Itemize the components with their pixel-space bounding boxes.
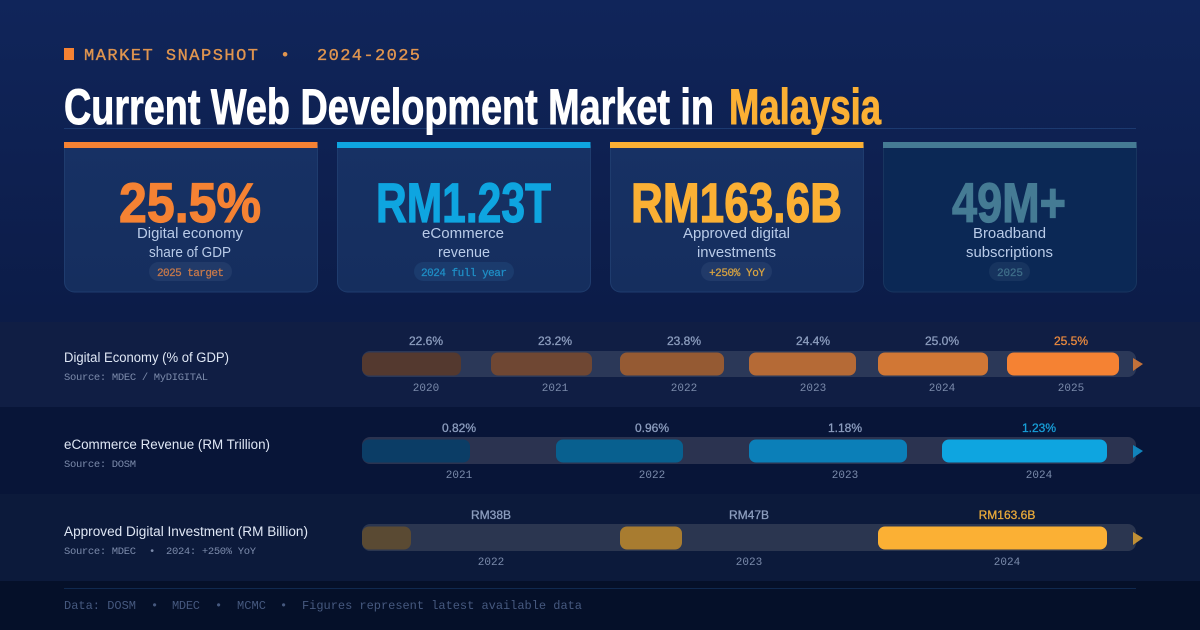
chart: digital economy bars: 22.6% <box>409 334 443 348</box>
chart: digital economy bars: 25.0% <box>925 334 959 348</box>
row label: digital economy <box>64 350 229 384</box>
KPI label: approved digital investments: Approved digital <box>683 225 790 242</box>
tag: 2025: 2025 <box>997 268 1023 280</box>
row label: approved digital investment: • <box>149 546 155 558</box>
arrow: digital economy <box>1133 358 1143 371</box>
tag: 2025 target: 2025 target <box>157 268 224 280</box>
title: Current Web Development Market in <box>64 79 714 135</box>
KPI label: broadband subscriptions: subscriptions <box>966 244 1053 261</box>
footer: data sources <box>64 599 582 613</box>
chart: eCommerce bars: 2021 <box>446 470 473 482</box>
tag: +250% YoY <box>701 262 772 281</box>
chart: investment bars: 2024 <box>994 557 1021 569</box>
arrow: eCommerce <box>1133 445 1143 458</box>
panel: eCommerce revenue KPI <box>337 142 590 292</box>
chart: digital economy bars: 23.2% <box>538 334 572 348</box>
row label: eCommerce revenue: eCommerce Revenue (RM Trillion) <box>64 437 270 452</box>
panel: digital economy timeline <box>64 334 1143 395</box>
footer: data sources: Data: DOSM <box>64 599 136 613</box>
eyebrow: market snapshot <box>64 47 420 66</box>
chart: investment bars: 2022 <box>478 557 504 569</box>
chart: investment bars: RM47B <box>729 508 769 522</box>
row label: approved digital investment <box>64 524 308 558</box>
chart: digital economy bars: 2025 <box>1058 383 1084 395</box>
title: Malaysia <box>729 79 882 135</box>
chart: eCommerce bars <box>362 421 1136 482</box>
KPI value: 49M+: 49M+ <box>952 171 1066 234</box>
chart: digital economy bars: 25.5% <box>1054 334 1088 348</box>
KPI label: digital economy share: Digital economy <box>137 225 243 242</box>
chart: eCommerce bars: 2024 <box>1026 470 1053 482</box>
row label: eCommerce revenue: Source: DOSM <box>64 459 136 471</box>
KPI label: approved digital investments <box>683 225 790 261</box>
chart: eCommerce bars: 0.82% <box>442 421 476 435</box>
KPI label: eCommerce revenue <box>422 225 504 261</box>
arrow: investment <box>1133 532 1143 545</box>
KPI label: digital economy share: share of GDP <box>149 244 231 261</box>
tag: +250% YoY: +250% YoY <box>709 268 765 280</box>
chart: digital economy bars <box>362 334 1136 395</box>
chart: investment bars: RM38B <box>471 508 511 522</box>
KPI label: broadband subscriptions <box>966 225 1053 261</box>
chart: digital economy bars: 2023 <box>800 383 826 395</box>
tag: 2025 target <box>149 262 232 281</box>
panel: broadband subscriptions KPI <box>883 142 1136 292</box>
row label: digital economy: Digital Economy (% of GDP) <box>64 350 229 365</box>
KPI label: approved digital investments: investments <box>697 244 776 261</box>
eyebrow: market snapshot: 2024-2025 <box>317 47 420 66</box>
eyebrow: market snapshot: • <box>280 47 290 66</box>
chart: digital economy bars: 2020 <box>413 383 439 395</box>
footer: data sources: • <box>215 599 222 613</box>
panel: approved digital investment timeline <box>64 508 1143 569</box>
row label: approved digital investment: 2024: +250% YoY <box>166 546 257 558</box>
tag: 2024 full year <box>414 262 514 281</box>
panel: approved digital investments KPI <box>610 142 864 292</box>
chart: digital economy bars: 2021 <box>542 383 569 395</box>
footer: data sources: MDEC <box>172 599 200 613</box>
chart: eCommerce bars: 1.18% <box>828 421 862 435</box>
row label: digital economy: Source: MDEC / MyDIGITAL <box>64 372 208 384</box>
KPI value: RM1.23T: RM1.23T <box>376 171 551 234</box>
chart: eCommerce bars: 1.23% <box>1022 421 1056 435</box>
KPI label: eCommerce revenue: revenue <box>438 244 490 261</box>
KPI label: broadband subscriptions: Broadband <box>973 225 1046 242</box>
footer: data sources: • <box>280 599 287 613</box>
row label: approved digital investment: Source: MDEC <box>64 546 136 558</box>
chart: eCommerce bars: 2022 <box>639 470 665 482</box>
chart: digital economy bars: 24.4% <box>796 334 830 348</box>
row label: approved digital investment: Approved Digital Investment (RM Billion) <box>64 524 308 539</box>
KPI label: eCommerce revenue: eCommerce <box>422 225 504 242</box>
panel: digital economy KPI <box>64 142 318 292</box>
eyebrow: market snapshot: MARKET SNAPSHOT <box>84 47 258 66</box>
tag: 2024 full year: 2024 full year <box>421 268 507 280</box>
panel: eCommerce revenue timeline <box>64 421 1143 482</box>
chart: investment bars: RM163.6B <box>979 508 1035 522</box>
chart: eCommerce bars: 0.96% <box>635 421 669 435</box>
chart: investment bars <box>362 508 1136 569</box>
footer: data sources: Figures represent latest available data <box>302 599 582 613</box>
KPI value: 25.5%: 25.5% <box>119 171 261 234</box>
chart: investment bars: 2023 <box>736 557 762 569</box>
KPI value: RM163.6B: RM163.6B <box>631 171 842 234</box>
row label: eCommerce revenue <box>64 437 270 471</box>
chart: digital economy bars: 2022 <box>671 383 697 395</box>
chart: eCommerce bars: 2023 <box>832 470 858 482</box>
KPI label: digital economy share <box>137 225 243 261</box>
chart: digital economy bars: 2024 <box>929 383 956 395</box>
footer: data sources: MCMC <box>237 599 266 613</box>
chart: digital economy bars: 23.8% <box>667 334 701 348</box>
footer: data sources: • <box>151 599 158 613</box>
tag: 2025 <box>989 262 1030 281</box>
